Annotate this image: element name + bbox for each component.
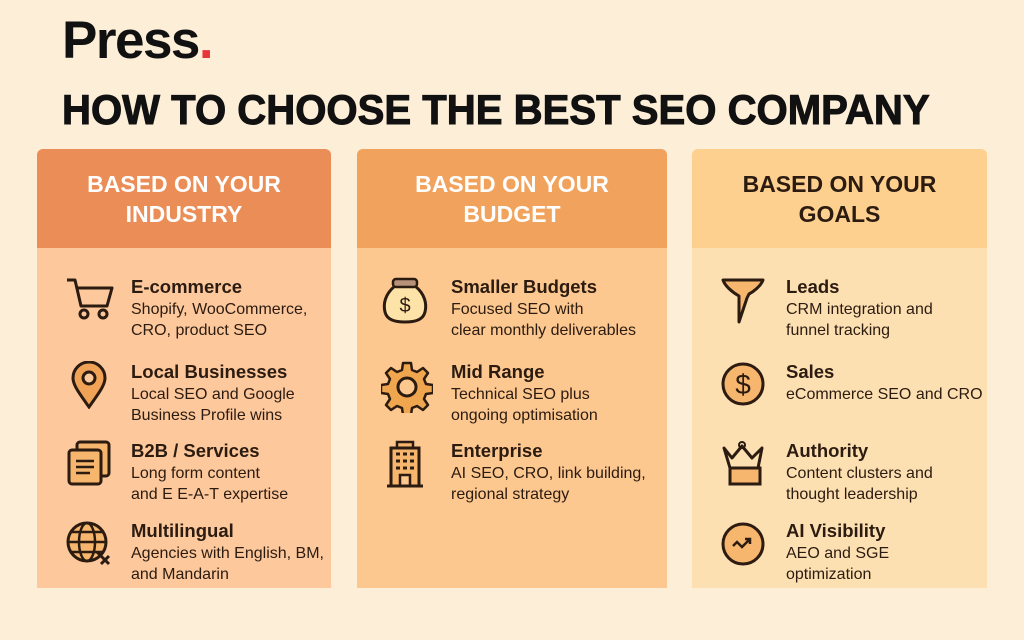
panel: budget: regional strategy [451, 486, 569, 503]
panel header: goals [692, 149, 987, 248]
panel: goals: CRM integration and [786, 301, 933, 318]
panel: industry: and E E-A-T expertise [131, 486, 288, 503]
panel header: industry [37, 149, 331, 248]
panel: goals: optimization [786, 566, 871, 583]
panel: budget: Smaller Budgets [451, 276, 597, 297]
panel: goals: eCommerce SEO and CRO [786, 386, 983, 403]
panel: industry: Business Profile wins [131, 407, 282, 424]
panel: budget: Technical SEO plus [451, 386, 590, 403]
panel: industry: Local Businesses [131, 361, 287, 382]
panel: budget: Enterprise [451, 440, 543, 461]
panel: industry: Long form content [131, 465, 260, 482]
logo: Press. [62, 11, 212, 70]
item: local businesses [72, 361, 295, 424]
panel: goals: Authority [786, 440, 868, 461]
item: b2b services [68, 440, 288, 503]
panel: goals: AI Visibility [786, 520, 885, 541]
panel header: goals: BASED ON YOUR [743, 170, 936, 196]
panel: industry: Shopify, WooCommerce, [131, 301, 307, 318]
panel: goals: Content clusters and [786, 465, 933, 482]
panel: budget: ongoing optimisation [451, 407, 598, 424]
panel: budget: clear monthly deliverables [451, 322, 636, 339]
panel: industry: Multilingual [131, 520, 234, 541]
panel: industry [37, 149, 331, 588]
panel: goals: Sales [786, 361, 834, 382]
item: leads [722, 276, 933, 339]
panel header: budget: BASED ON YOUR [415, 170, 609, 196]
item: smaller budgets [382, 276, 636, 339]
panel: budget: Focused SEO with [451, 301, 584, 318]
panel: goals: Leads [786, 276, 839, 297]
item: multilingual [66, 520, 324, 583]
panel: budget [357, 149, 667, 588]
panel: industry: and Mandarin [131, 566, 229, 583]
item: ai visibility [722, 520, 889, 583]
panel header: industry: BASED ON YOUR [87, 170, 281, 196]
panel header: goals: GOALS [799, 200, 880, 226]
panel: budget: AI SEO, CRO, link building, [451, 465, 646, 482]
item: enterprise [387, 440, 646, 503]
panel: goals: AEO and SGE [786, 545, 889, 562]
panel: industry: Agencies with English, BM, [131, 545, 324, 562]
panel: industry: E-commerce [131, 276, 242, 297]
panel header: budget [357, 149, 667, 248]
panel header: budget: BUDGET [463, 200, 561, 226]
panel: budget: $ [399, 295, 411, 317]
item: authority [722, 440, 933, 503]
panel: industry: B2B / Services [131, 440, 260, 461]
panel: industry: CRO, product SEO [131, 322, 267, 339]
panel: goals: funnel tracking [786, 322, 890, 339]
panel header: industry: INDUSTRY [126, 200, 242, 226]
item: mid range [381, 361, 598, 424]
panel: industry: Local SEO and Google [131, 386, 295, 403]
item: sales [722, 361, 983, 406]
panel: goals [692, 149, 987, 588]
panel: goals: $ [735, 369, 751, 400]
panel: budget: Mid Range [451, 361, 545, 382]
panel: goals: thought leadership [786, 486, 918, 503]
item: e-commerce [67, 276, 307, 339]
title: HOW TO CHOOSE THE BEST SEO COMPANY [62, 86, 930, 133]
